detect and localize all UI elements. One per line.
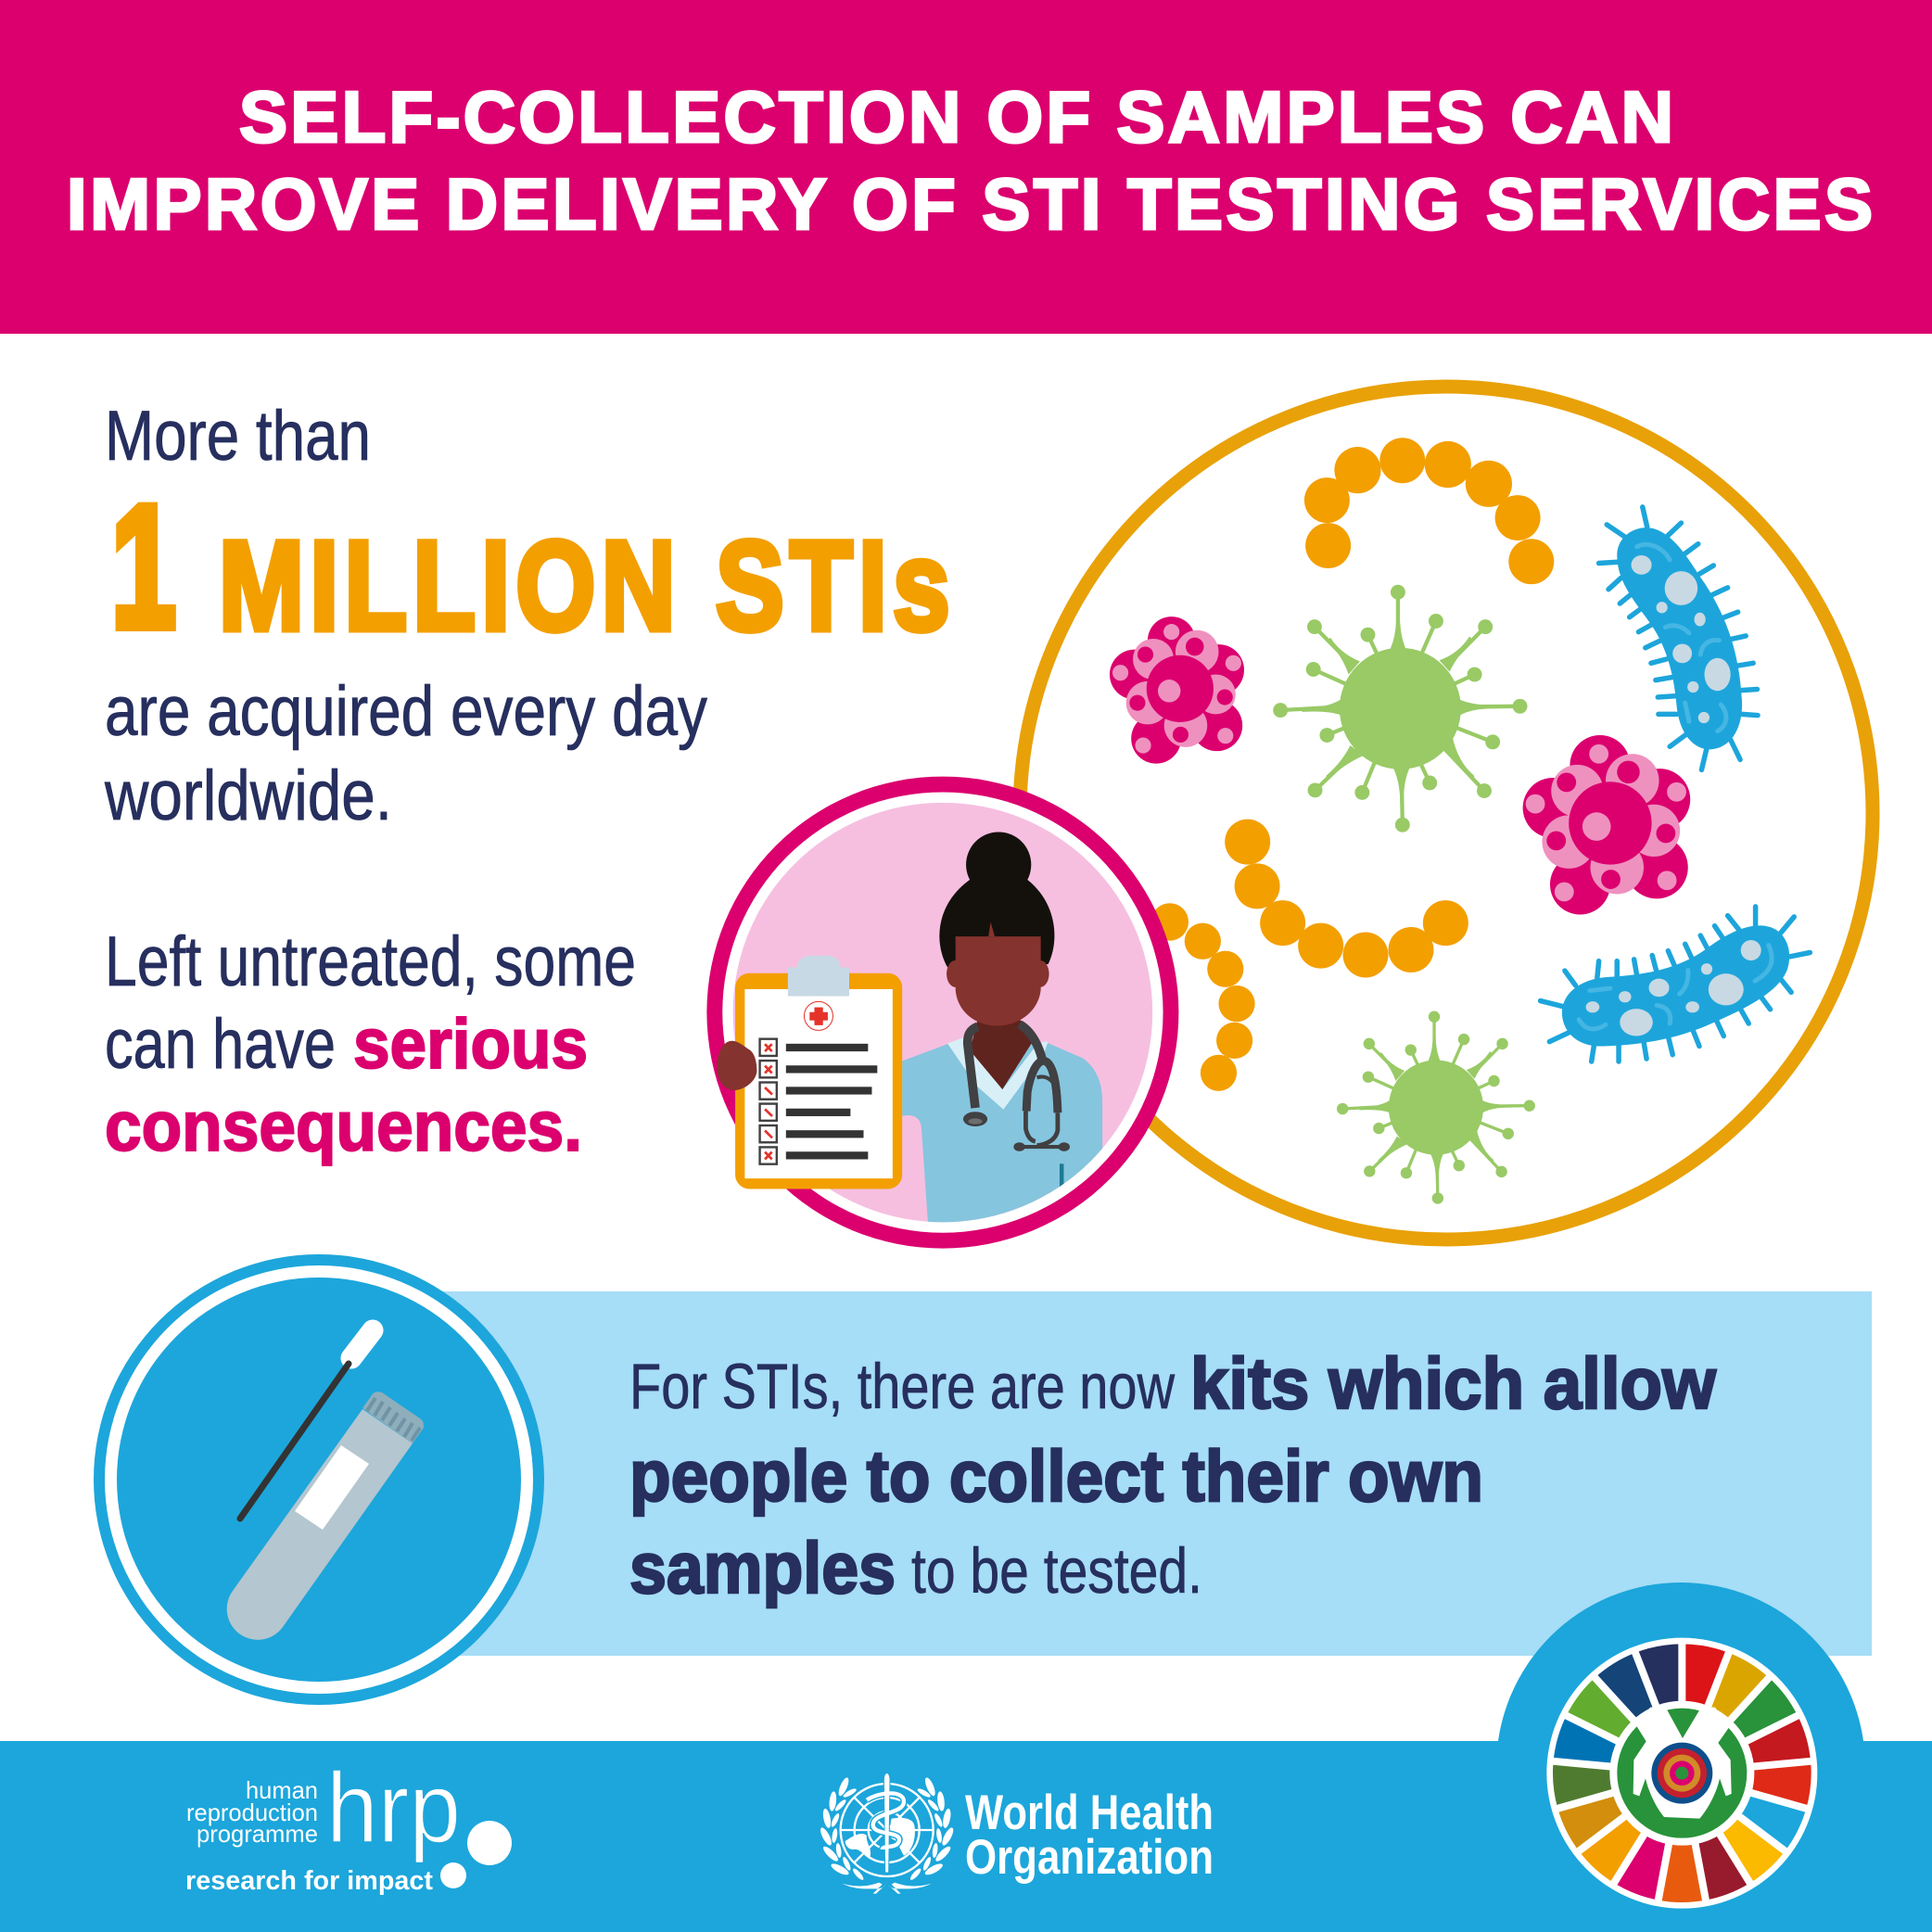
statistic text block: are acquired every day: [105, 672, 707, 751]
kits text: to be tested.: [911, 1535, 1202, 1607]
logo: HRP: hrp: [326, 1751, 461, 1863]
icon: virus large: [1273, 585, 1528, 833]
consequences text block: [105, 922, 636, 1166]
consequences text block: consequences.: [105, 1087, 582, 1166]
icon: pink cell cluster right: [1523, 735, 1690, 914]
statistic text block: 1: [111, 469, 176, 664]
icon: cocci chain middle: [1225, 820, 1468, 977]
footer bar: [0, 1741, 1932, 1932]
logo: HRP: human: [246, 1776, 318, 1804]
logo: HRP: [185, 1751, 512, 1896]
logo: WHO emblem: [818, 1773, 956, 1894]
panel: self-collection kits band: [315, 1291, 1872, 1656]
footer arch: [1496, 1582, 1865, 1932]
title: [67, 76, 1873, 245]
panel: health worker circle: [706, 777, 1178, 1249]
title: SELF-COLLECTION OF SAMPLES CAN: [239, 76, 1673, 158]
pathogens illustrations: [1110, 438, 1810, 1204]
header banner: [0, 0, 1932, 334]
consequences text block: serious: [353, 1005, 588, 1084]
statistic text block: More than: [105, 397, 371, 476]
logo: WHO wordmark: [965, 1786, 1214, 1885]
icon: swab: [240, 1330, 373, 1519]
kits text: people to collect their own: [629, 1435, 1483, 1517]
logo: WHO wordmark: Organization: [965, 1830, 1214, 1885]
logo: HRP: reproduction: [186, 1799, 318, 1826]
kits text: samples: [629, 1527, 896, 1608]
logo: WHO wordmark: World Health: [965, 1786, 1214, 1840]
statistic text block: worldwide.: [104, 756, 392, 835]
icon: swab and tube circle: [94, 1254, 544, 1705]
statistic text block: MILLION STIs: [219, 515, 956, 657]
icon: virus small: [1337, 1011, 1535, 1204]
icon: cocci chain lower: [1151, 903, 1255, 1091]
kits text: kits which allow: [1190, 1342, 1716, 1424]
logo: HRP: programme: [197, 1820, 318, 1848]
illustration: health worker: [727, 798, 1158, 1229]
icon: bacterium horizontal: [1541, 907, 1810, 1061]
icon: cocci chain top: [1304, 438, 1554, 584]
title: IMPROVE DELIVERY OF STI TESTING SERVICES: [67, 163, 1873, 245]
icon: clipboard checklist: [735, 956, 902, 1189]
icon: sample tube: [227, 1392, 424, 1640]
icon: bacterium vertical: [1599, 507, 1758, 769]
panel: pathogens circle: [1020, 387, 1873, 1239]
logo: SDG wheel: [1540, 1631, 1824, 1915]
consequences text block: can have: [105, 1005, 336, 1084]
icon: hand: [717, 1041, 756, 1090]
icon: pink cell cluster left: [1110, 616, 1244, 764]
statistic text block: [104, 397, 956, 835]
kits text: [629, 1342, 1716, 1608]
kits text: For STIs, there are now: [629, 1351, 1175, 1422]
logo: HRP: research for impact: [185, 1866, 433, 1896]
consequences text block: Left untreated, some: [105, 922, 636, 1001]
